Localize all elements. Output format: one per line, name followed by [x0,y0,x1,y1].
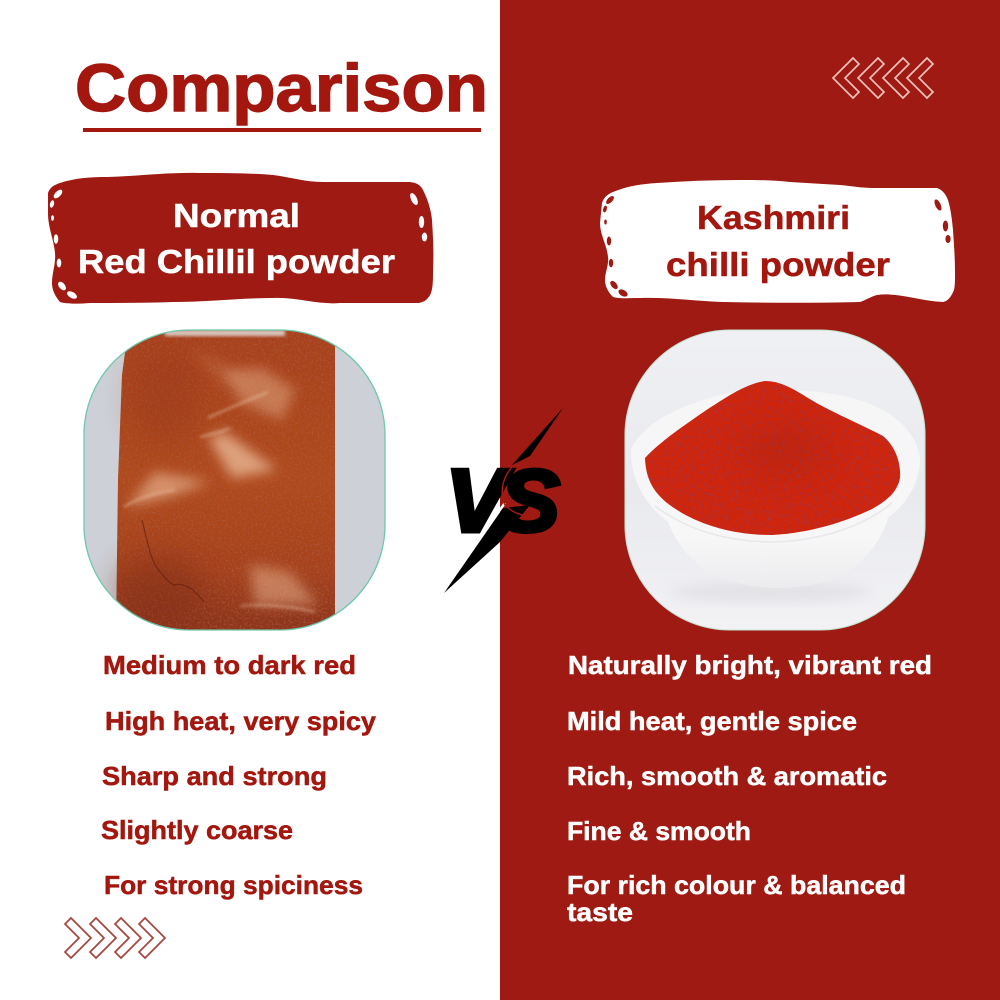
text block: kashmiri chilli attributes [567,650,932,927]
text block: normal chilli attributes [101,650,377,900]
text block: kashmiri chilli attributes: Fine & smooth [567,816,751,846]
text block: kashmiri chilli attributes: Naturally bright, vibrant red [568,650,932,680]
letter V: V [446,451,512,550]
panel: normal chilli heading: Red Chillil powder [78,243,395,280]
text block: kashmiri chilli attributes: Mild heat, gentle spice [567,706,857,736]
highlights on the plastic [127,350,318,605]
bowl [631,390,920,588]
text block: normal chilli attributes: High heat, very spicy [105,706,377,736]
panel: kashmiri chilli heading [600,180,955,303]
background: left white half [0,0,500,1000]
icon: versus lightning bolt [444,408,563,593]
panel: normal chilli heading: Normal [173,197,300,234]
text block: kashmiri chilli attributes: Rich, smooth & aromatic [567,761,887,791]
panel: kashmiri chilli heading: chilli powder [666,246,890,283]
text block: normal chilli attributes: Sharp and strong [102,761,327,791]
icon: chevrons pointing right [65,918,165,958]
panel: normal chilli heading [48,173,433,304]
text block: kashmiri chilli attributes: taste [567,897,633,927]
chilli powder mound [645,381,900,535]
decorative dots: left heading [49,188,427,300]
text block: kashmiri chilli attributes: For rich colour & balanced [567,870,906,900]
text block: normal chilli attributes: For strong spiciness [104,870,363,900]
image: normal chilli powder in plastic bag [84,330,385,630]
background: right red half [500,0,1000,1000]
decorative dots: right heading [602,195,951,298]
image: kashmiri chilli powder in white bowl [625,330,925,630]
letter S: S [500,451,560,550]
icon: chevrons pointing left [833,58,933,98]
panel: kashmiri chilli heading: Kashmiri [697,199,850,236]
text block: normal chilli attributes: Medium to dark red [103,650,356,680]
title: Comparison [75,51,488,126]
text block: normal chilli attributes: Slightly coarse [101,815,293,845]
